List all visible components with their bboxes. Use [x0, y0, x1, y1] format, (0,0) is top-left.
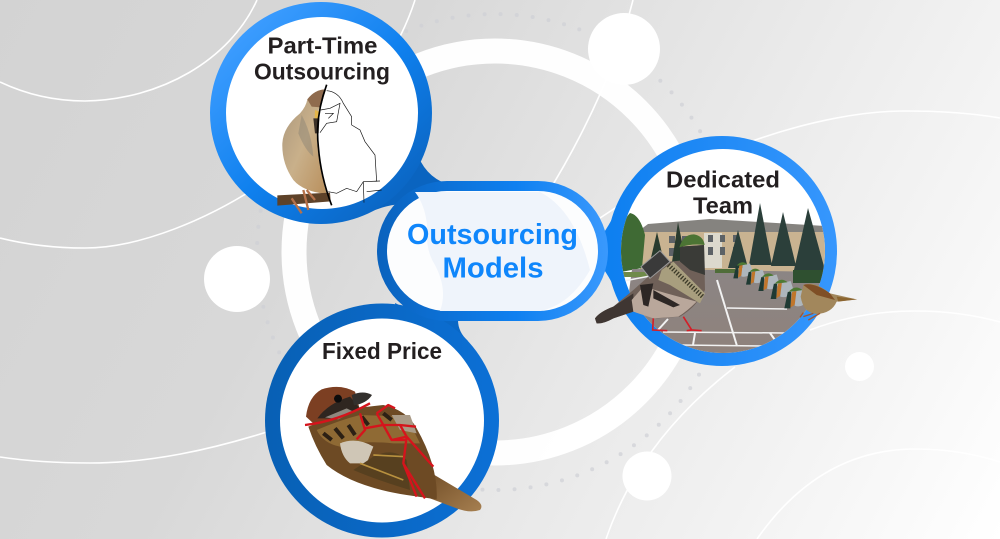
title: dedicated team — [666, 166, 780, 218]
panel: fixed price — [265, 304, 499, 538]
title: dedicated team: Team — [693, 192, 753, 218]
large white ring — [294, 51, 696, 453]
title: part-time outsourcing — [254, 32, 390, 84]
title: fixed price: Fixed Price — [322, 338, 442, 364]
title: dedicated team: Dedicated — [666, 166, 780, 192]
white decorative circles — [204, 13, 874, 500]
title: part-time outsourcing: Part-Time — [268, 32, 378, 58]
icon: pigeon with belt, helmet and phone — [595, 234, 705, 331]
dotted orbit — [257, 14, 733, 490]
photo: building and car park — [620, 203, 827, 360]
panel: part-time outsourcing — [210, 2, 432, 224]
title: outsourcing models: Outsourcing — [407, 219, 578, 251]
title: outsourcing models — [407, 219, 578, 284]
icon: half sparrow half sketch — [277, 85, 382, 213]
panel: outsourcing models centre — [377, 181, 608, 321]
title: outsourcing models: Models — [442, 252, 544, 284]
panel: dedicated team — [595, 136, 857, 366]
connector necks — [368, 150, 640, 341]
icon: row of soldier sparrows — [595, 234, 857, 331]
icon: sparrow tied with red net — [305, 387, 481, 511]
title: part-time outsourcing: Outsourcing — [254, 58, 390, 84]
